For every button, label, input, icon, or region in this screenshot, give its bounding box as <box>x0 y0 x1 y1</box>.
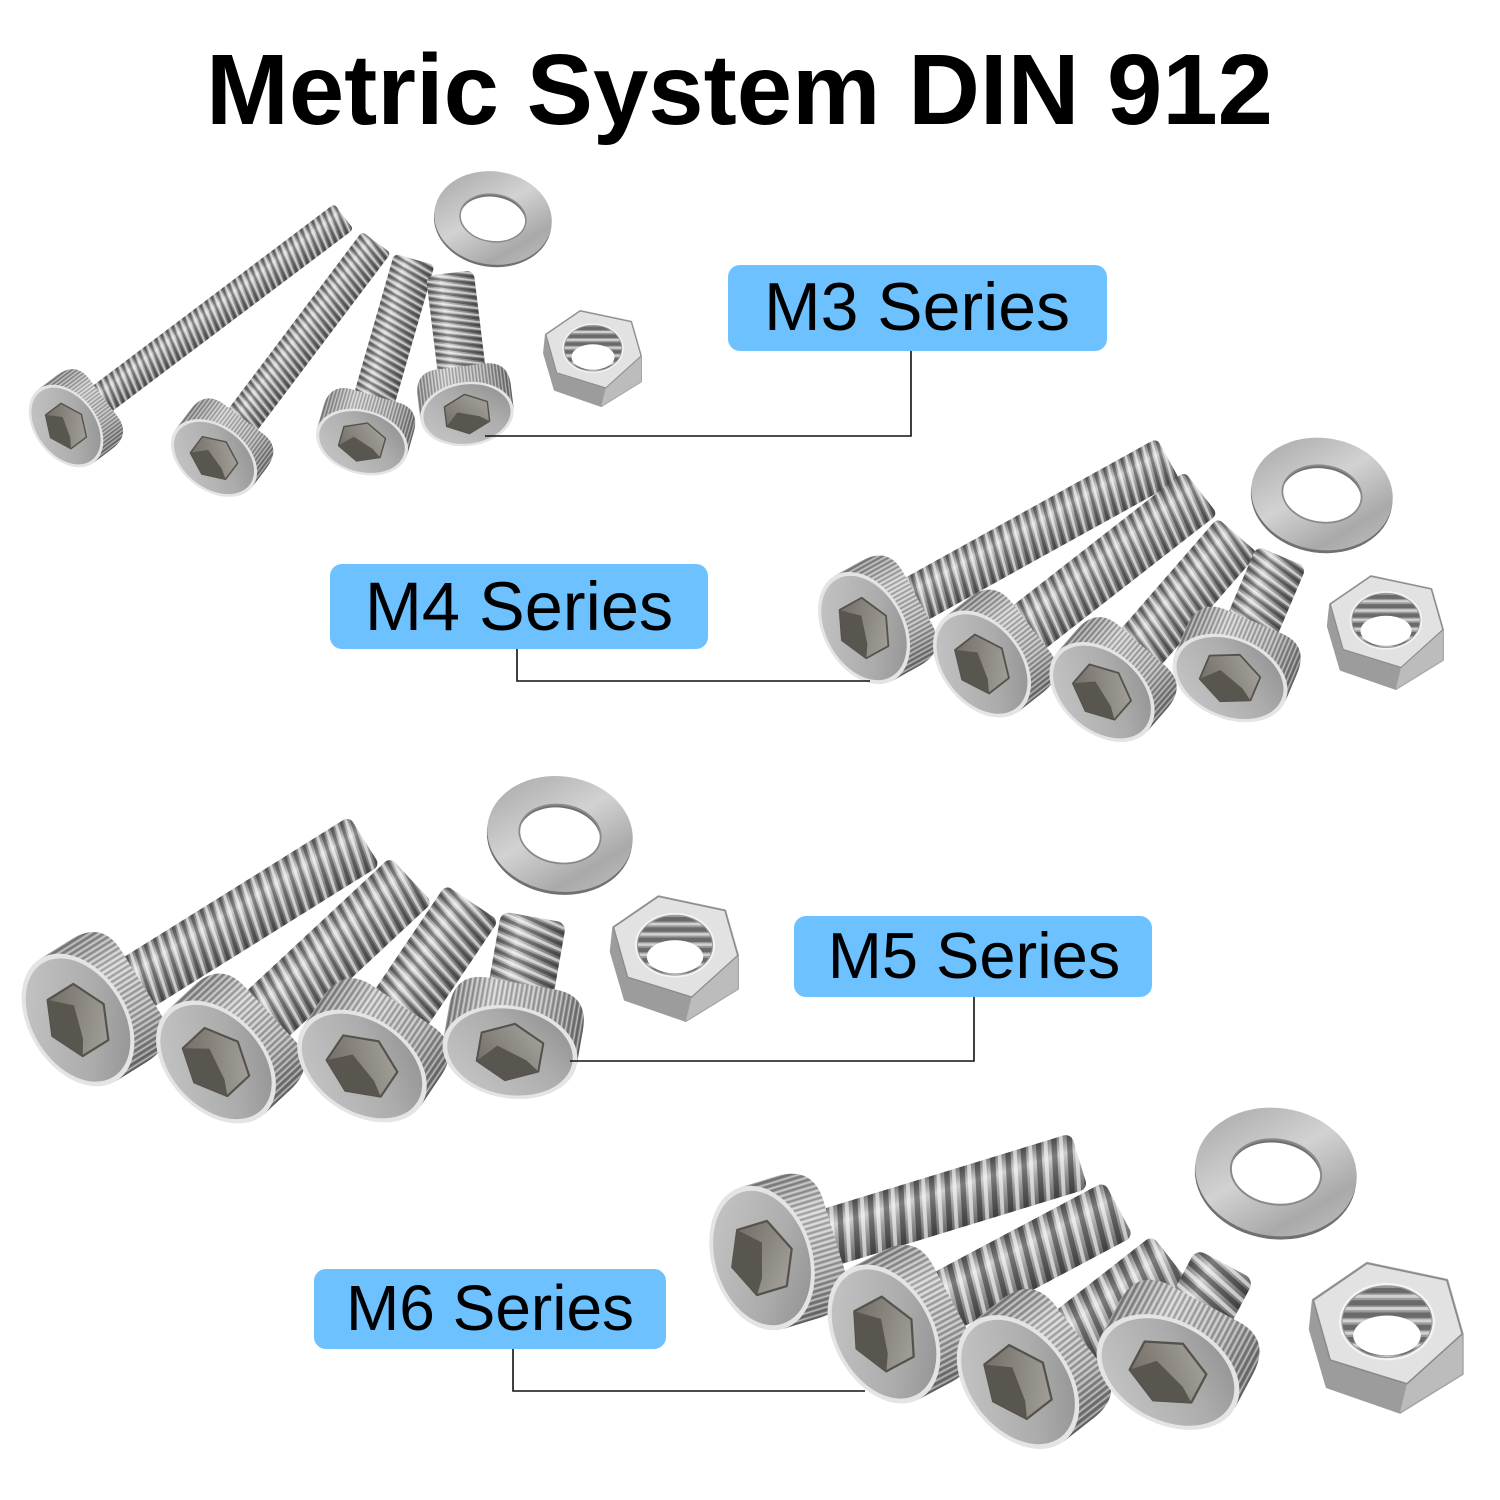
M3 leader line <box>485 351 911 436</box>
label: M5 Series: M5 Series <box>828 919 1120 992</box>
M4 screw medium <box>1030 496 1283 762</box>
M4 leader line <box>517 649 870 681</box>
label: M6 Series: M6 Series <box>346 1272 634 1344</box>
M5 screw short <box>435 905 601 1109</box>
group: M3 hardware <box>13 164 641 513</box>
M3 screw longest <box>13 180 372 482</box>
M5 screw medium <box>276 863 531 1146</box>
M3 nut <box>544 311 641 406</box>
M6 screw medium <box>932 1202 1219 1472</box>
label: M4 Series: M4 Series <box>365 568 673 645</box>
M3 screw medium <box>308 246 460 486</box>
M6 screw longest <box>692 1090 1101 1343</box>
M6 screw short <box>1077 1229 1292 1453</box>
M4 washer <box>1243 429 1400 562</box>
M5 washer <box>479 767 640 904</box>
group: M4 hardware <box>799 407 1443 762</box>
M3 screw short <box>403 267 518 451</box>
M3 washer <box>428 164 558 275</box>
group: M6 hardware <box>692 1090 1462 1472</box>
M5 screw long <box>132 828 460 1147</box>
title: Metric System DIN 912 <box>206 34 1273 146</box>
M3 screw long <box>156 213 415 513</box>
M4 screw long <box>913 446 1238 736</box>
group: M5 hardware <box>0 767 738 1147</box>
M4 screw longest <box>799 407 1197 700</box>
label: M3 Series: M3 Series <box>764 269 1070 345</box>
M6 washer <box>1186 1097 1365 1250</box>
M4 nut <box>1328 576 1443 689</box>
M6 leader line <box>513 1349 865 1391</box>
M5 nut <box>611 897 738 1021</box>
M5 screw longest <box>0 780 403 1107</box>
M6 screw long <box>805 1144 1154 1423</box>
M6 nut <box>1310 1263 1462 1412</box>
M4 screw short <box>1159 533 1337 739</box>
M5 leader line <box>570 997 974 1061</box>
